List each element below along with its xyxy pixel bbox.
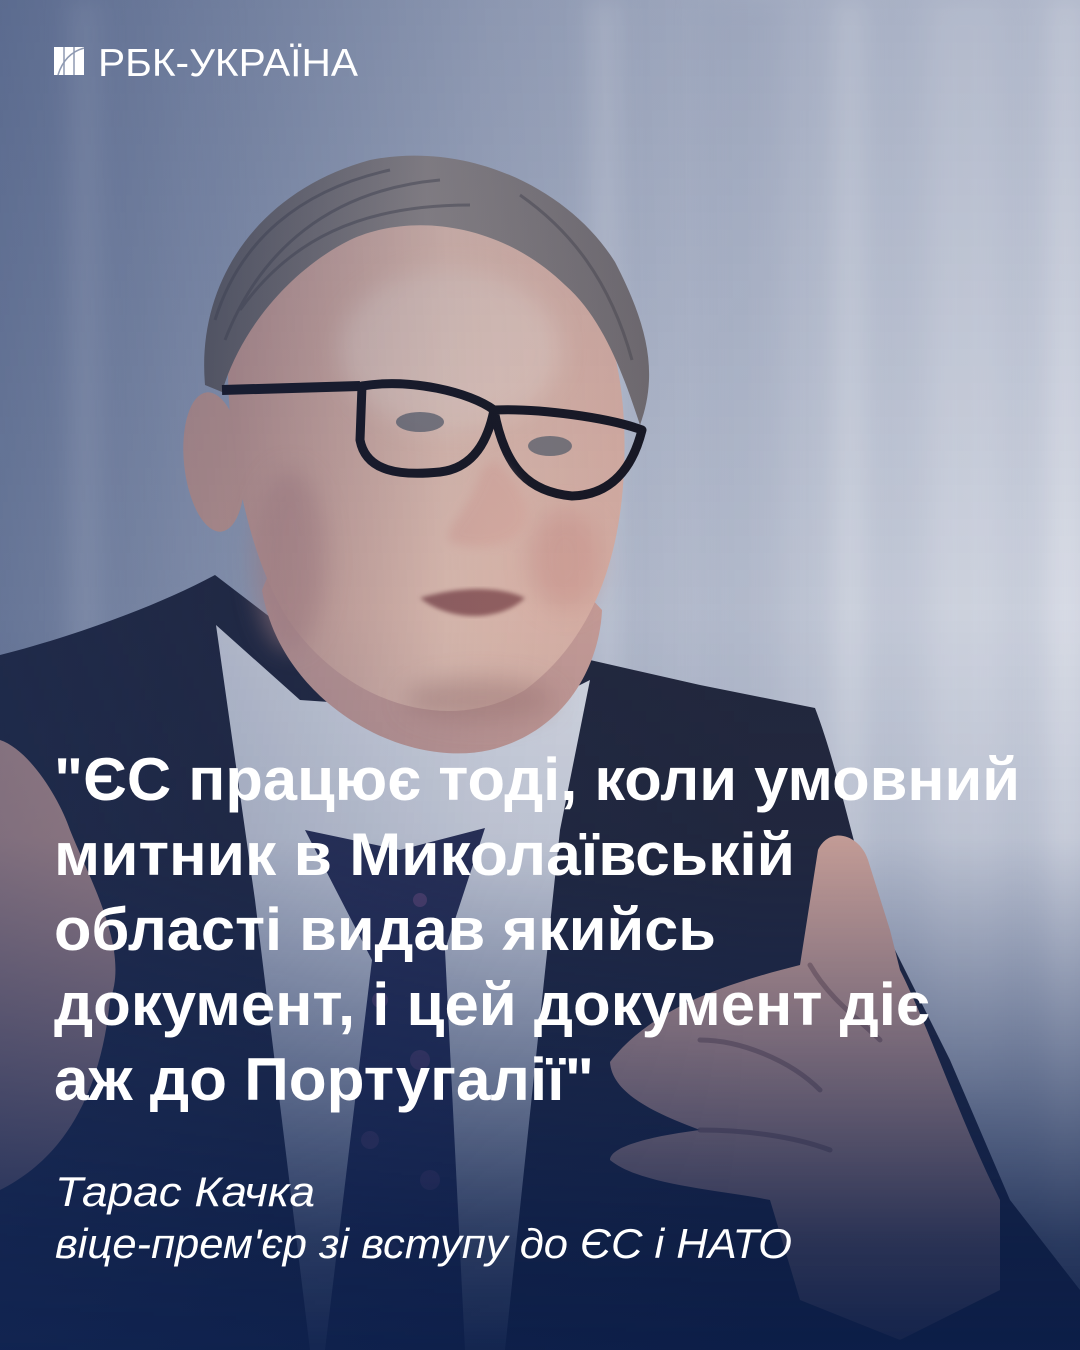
tie pattern — [361, 893, 440, 1260]
nose — [448, 460, 528, 547]
hand right — [610, 836, 1000, 1340]
neck and jowl — [262, 500, 602, 753]
quote: митник в Миколаївській — [54, 821, 795, 888]
logo mark — [54, 47, 84, 75]
quote: документ, і цей документ діє — [54, 971, 930, 1038]
quote — [54, 746, 1020, 1113]
logo — [54, 42, 358, 85]
speaker title: віце-прем'єр зі вступу до ЄС і НАТО — [55, 1220, 792, 1267]
hand left — [0, 740, 115, 1190]
quote: "ЄС працює тоді, коли умовний — [54, 746, 1020, 813]
speaker name: Тарас Качка — [55, 1168, 315, 1215]
logo wordmark: РБК-УКРАЇНА — [98, 42, 358, 85]
hair — [204, 156, 649, 425]
tie — [305, 828, 485, 1350]
hand finger gaps — [700, 965, 880, 1150]
face shading — [255, 270, 600, 722]
quote: області видав якийсь — [54, 896, 716, 963]
hair strands — [215, 170, 632, 360]
mouth — [420, 589, 525, 616]
ear — [177, 389, 251, 535]
glasses — [222, 384, 642, 496]
shirt — [216, 625, 590, 1350]
eyes — [396, 412, 572, 456]
suit jacket — [0, 575, 1080, 1350]
quote: аж до Португалії" — [54, 1046, 594, 1113]
attribution — [55, 1168, 792, 1267]
face — [228, 216, 625, 711]
